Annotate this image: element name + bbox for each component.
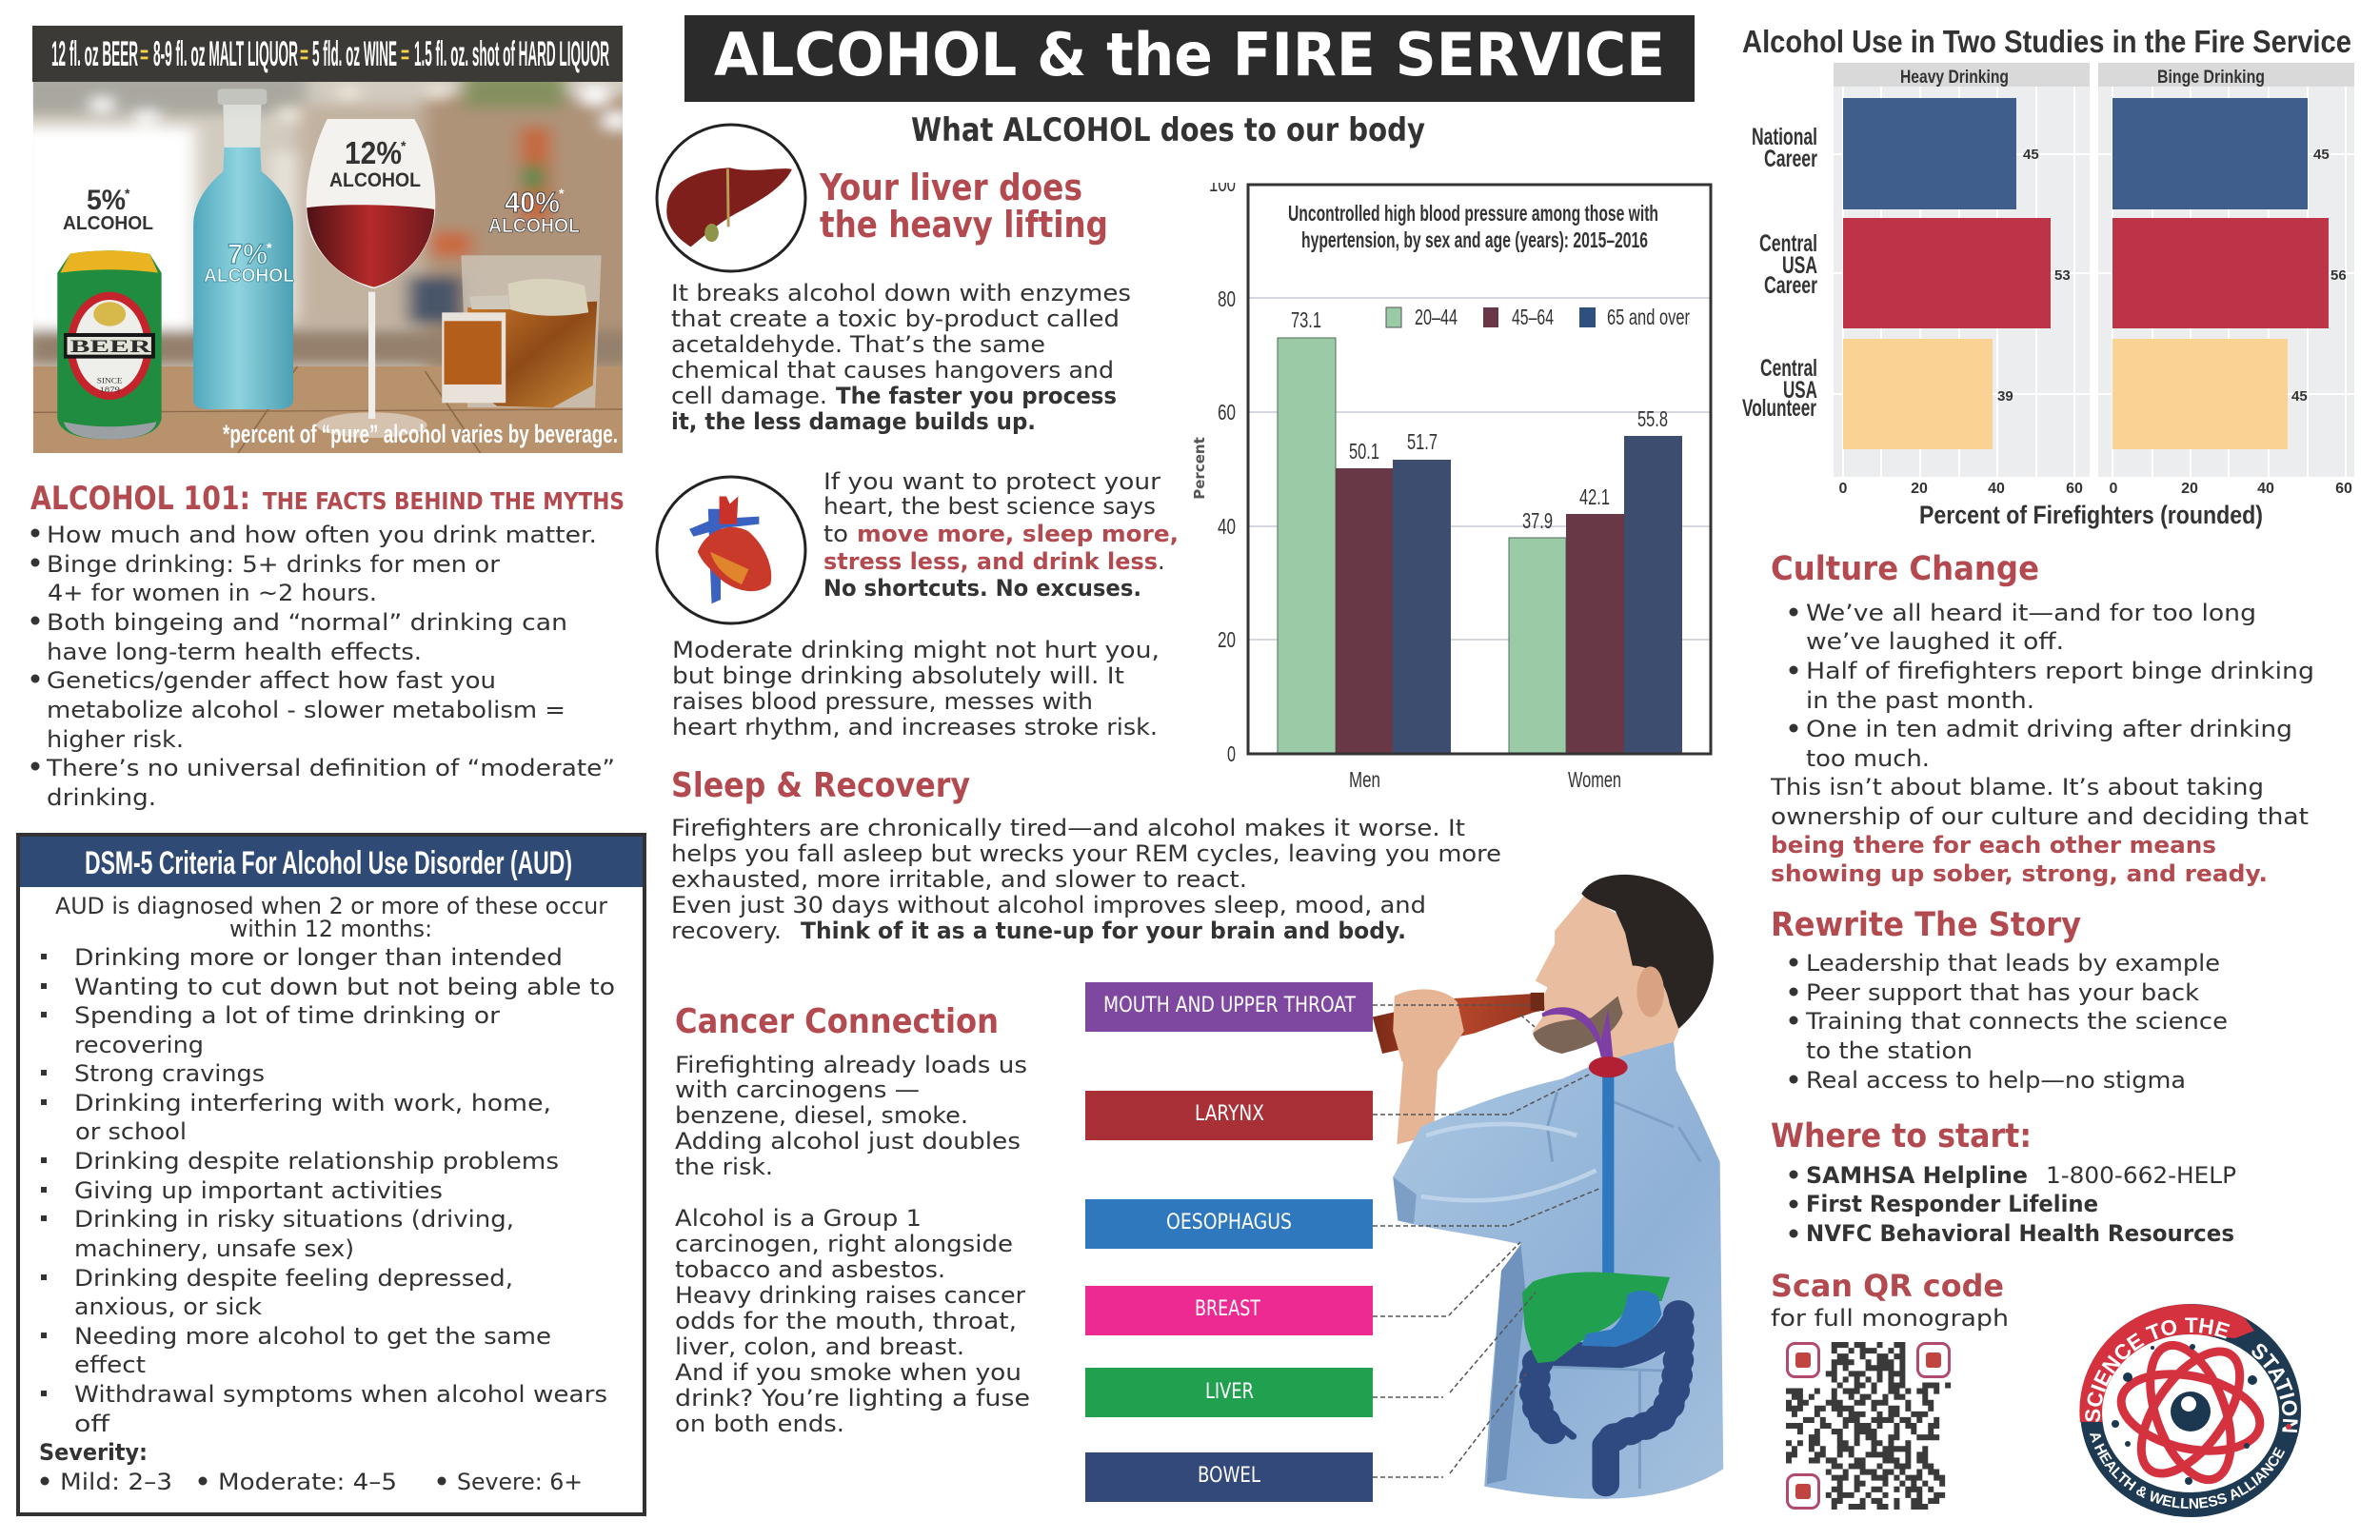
panel: liver [657,125,1131,435]
text: moderate drinking: raises blood pressure, messes with [672,688,1093,715]
text: cancer: Firefighting already loads us [675,1052,1027,1078]
heading: cancer: Cancer Connection [675,1002,999,1041]
alcohol percentage labels: *percent of “pure” alcohol varies by beverage. [223,420,618,448]
facet: binge drinking: 56 [2330,267,2347,284]
facet: heavy drinking: 53 [2054,267,2071,284]
alcohol percentage labels: * [125,186,130,201]
icon: liver [657,125,805,271]
label: mouth and upper throat [1085,982,1535,1032]
text: heart advice: No shortcuts. No excuses. [823,575,1141,602]
heading: liver: the heavy lifting [820,204,1108,246]
label: oesophagus: OESOPHAGUS [1166,1211,1292,1234]
alcohol 101 bullet list: metabolize alcohol - slower metabolism = [47,697,565,723]
heading: liver: Your liver does [819,167,1082,208]
DSM-5 criteria list: machinery, unsafe sex) [74,1235,354,1262]
alcohol 101 bullet list [30,522,615,811]
alcohol 101 bullet list: higher risk. [47,726,184,753]
DSM-5 criteria list: effect [74,1352,146,1378]
y axis: 40 [1218,514,1236,539]
label: breast [1085,1242,1520,1335]
rewrite bullets: Real access to help—no stigma [1806,1067,2186,1094]
category labels: USA [1782,252,1817,279]
label: bowel [1085,1373,1526,1502]
alcohol percentage labels: * [401,138,407,153]
category labels: USA [1783,377,1817,404]
text: cancer: with carcinogens — [675,1076,920,1103]
facet: heavy drinking: 45 [2023,147,2039,163]
chart title [1288,201,1658,252]
text: liver: The faster you process [836,383,1117,409]
text: liver: cell damage. [671,383,827,409]
text: 1.5 fl. oz. shot of HARD LIQUOR [414,34,609,73]
text: cancer: on both ends. [675,1411,844,1437]
alcohol 101 bullet list: There’s no universal definition of “moderate” [46,755,615,781]
resources list: SAMHSA Helpline [1806,1162,2028,1189]
facet: heavy drinking: 39 [1997,388,2013,405]
text: liver: chemical that causes hangovers and [671,357,1114,384]
subtitle: What ALCOHOL does to our body [911,111,1425,149]
DSM-5 criteria list: off [74,1411,110,1437]
heading: sleep: Sleep & Recovery [671,766,970,805]
culture change statement: showing up sober, strong, and ready. [1771,860,2268,887]
drink equivalents bar: = [140,40,149,69]
x axis: 40 [2257,481,2274,497]
DSM-5 header: DSM-5 Criteria For Alcohol Use Disorder (AUD) [85,845,572,881]
facet: binge drinking: Binge Drinking [2157,68,2265,88]
drinks photo [17,73,638,453]
rewrite bullets: Peer support that has your back [1806,979,2199,1006]
panel: rewrite the story [1771,906,2228,1094]
bar chart: uncontrolled high blood pressure [1191,162,1711,792]
text: cancer: tobacco and asbestos. [675,1256,945,1283]
heading: rewrite the story: Rewrite The Story [1771,906,2081,944]
bars: women [1509,406,1682,792]
bars: men: Men [1349,767,1380,792]
beer can: BEER [70,336,152,356]
beer can: 1879 [99,385,120,394]
alcohol percentage labels: 40% [505,186,560,219]
bar chart: alcohol use in two studies [1742,24,2354,529]
alcohol 101 bullet list: How much and how often you drink matter. [47,522,597,548]
x axis: 60 [2066,481,2083,497]
y axis: 0 [1227,741,1236,766]
text: heart advice: stress less, and drink less [823,548,1158,575]
chart title: hypertension, by sex and age (years): 2015–2016 [1301,227,1648,252]
y axis: Percent [1191,437,1208,500]
drink equivalents bar: 5 fld. oz WINE [312,34,397,73]
x axis: 60 [2335,481,2352,497]
label: oesophagus [1085,1188,1601,1249]
severity scale: Severe: 6+ [457,1469,583,1495]
culture change bullets: in the past month. [1806,687,2034,714]
chart legend: 65 and over [1607,305,1690,329]
text: heart advice [823,468,1179,602]
DSM-5 criteria list: Drinking more or longer than intended [74,944,563,971]
organ: bowel [1535,1314,1678,1484]
x axis: 40 [1988,481,2005,497]
alcohol 101 bullet list: drinking. [47,784,156,811]
logo ring text: SCIENCE TO THE [2085,1317,2230,1422]
alcohol percentage labels: 12% [345,135,402,170]
label: larynx: LARYNX [1195,1102,1264,1126]
culture change bullets: One in ten admit driving after drinking [1806,716,2292,742]
drink equivalents bar [32,26,623,82]
alcohol percentage labels: ALCOHOL [63,213,153,234]
alcohol percentage labels [63,135,618,448]
DSM-5 header [20,837,643,887]
text: heart advice: If you want to protect your [823,468,1160,495]
DSM-5 criteria list: Drinking interfering with work, home, [74,1090,551,1116]
logo ring text: STATION [2251,1344,2298,1432]
text: cancer: benzene, diesel, smoke. [675,1102,968,1129]
heading: where to start: Where to start: [1771,1117,2032,1155]
text: cancer: And if you smoke when you [675,1359,1021,1386]
organ: larynx [1589,1056,1628,1077]
heading: alcohol 101: THE FACTS BEHIND THE MYTHS [263,487,625,515]
text: liver: that create a toxic by-product called [671,306,1120,332]
DSM-5 intro [55,893,607,942]
culture change statement: being there for each other means [1771,832,2216,859]
organ: oesophagus [1608,1070,1628,1308]
label: mouth and upper throat: MOUTH AND UPPER THROAT [1103,994,1356,1017]
alcohol percentage labels: * [559,186,565,201]
label: bowel: BOWEL [1198,1464,1261,1488]
category labels: Volunteer [1742,395,1816,422]
facet: heavy drinking [1834,63,2090,477]
drink equivalents bar: 12 fl. oz BEER [51,34,138,73]
head and hair [1533,875,1714,1061]
culture change bullets [1790,600,2314,772]
heading: alcohol 101: ALCOHOL 101: [30,480,250,518]
DSM-5 criteria list: Withdrawal symptoms when alcohol wears [74,1381,607,1408]
bars: women: 42.1 [1579,484,1610,509]
severity scale: Severity: [39,1439,148,1466]
resources list: First Responder Lifeline [1806,1191,2098,1217]
whisky tumbler and shot [442,255,602,407]
DSM-5 intro: AUD is diagnosed when 2 or more of these occur [55,893,607,919]
chart legend [1386,305,1690,329]
DSM-5 criteria list [41,944,615,1437]
text: heart advice: to [823,521,848,547]
text: cancer: the risk. [675,1154,773,1180]
text: heart advice: move more, sleep more, [857,521,1179,547]
DSM-5 criteria list: anxious, or sick [74,1293,262,1320]
text: cancer: liver, colon, and breast. [675,1333,964,1360]
DSM-5 intro: within 12 months: [229,916,432,942]
label: larynx [1085,1074,1591,1140]
rewrite bullets: to the station [1806,1037,1973,1064]
facet: binge drinking: 45 [2291,388,2308,405]
panel: DSM-5 criteria [18,835,645,1514]
panel: cancer connection [675,1002,1030,1437]
icon: QR code [1786,1344,1951,1508]
beer can [57,250,162,440]
alcohol percentage labels: 7% [228,239,268,270]
x axis: Percent of Firefighters (rounded) [1919,501,2263,529]
text: sleep: Firefighters are chronically tired—and alcohol makes it worse. It [671,815,1465,841]
text: moderate drinking: Moderate drinking might not hurt you, [672,637,1160,663]
panel: QR code [1771,1268,2009,1508]
text: sleep: recovery. [671,918,782,944]
resources list: NVFC Behavioral Health Resources [1806,1220,2234,1247]
drink equivalents bar: = [401,40,409,69]
severity scale [39,1439,583,1495]
heading: scan QR: Scan QR code [1771,1268,2004,1304]
DSM-5 criteria list: Drinking despite relationship problems [74,1148,559,1175]
panel: culture change [1770,550,2314,887]
culture change bullets: Half of firefighters report binge drinking [1806,658,2314,684]
DSM-5 criteria list: recovering [74,1032,204,1058]
wine glass [307,119,435,438]
rewrite bullets: Leadership that leads by example [1806,950,2220,977]
title: ALCOHOL & the FIRE SERVICE [714,20,1665,89]
culture change statement [1770,774,2309,887]
text: cancer [675,1052,1030,1437]
text: cancer: drink? You’re lighting a fuse [675,1385,1030,1412]
alcohol percentage labels: ALCOHOL [488,215,580,237]
drink equivalents bar: 8-9 fl. oz MALT LIQUOR [153,34,298,73]
text: cancer: Adding alcohol just doubles [675,1128,1021,1155]
text: heart advice: heart, the best science says [823,493,1156,520]
text: cancer: Alcohol is a Group 1 [675,1205,922,1232]
logo ring text: A HEALTH & WELLNESS ALLIANCE [2090,1433,2285,1510]
icon: heart [657,477,805,623]
x axis: 20 [2181,481,2198,497]
resources list: 1-800-662-HELP [2046,1162,2236,1189]
chart title: Uncontrolled high blood pressure among those with [1288,201,1658,226]
text: sleep: helps you fall asleep but wrecks your REM cycles, leaving you more [671,840,1501,867]
heading: alcohol 101 [30,480,625,518]
DSM-5 criteria list: Strong cravings [74,1060,265,1087]
alcohol 101 bullet list: Genetics/gender affect how fast you [47,667,496,694]
heading: culture change: Culture Change [1771,550,2039,588]
text: sleep: exhausted, more irritable, and slower to react. [671,866,1247,893]
organ: mouth and throat [1541,1007,1613,1057]
DSM-5 criteria list: Needing more alcohol to get the same [74,1323,551,1350]
x axis: 0 [1839,481,1848,497]
label: liver [1085,1293,1536,1417]
alcohol 101 bullet list: 4+ for women in ~2 hours. [48,580,377,606]
text: cancer: odds for the mouth, throat, [675,1308,1017,1334]
organ: stomach [1581,1291,1661,1347]
beer can: SINCE [97,377,123,385]
text: moderate drinking [672,637,1160,740]
logo ring text [2085,1317,2298,1510]
bars: women: 37.9 [1522,508,1553,533]
alcohol 101 bullet list: Binge drinking: 5+ drinks for men or [47,551,500,578]
category labels: Central [1759,230,1817,257]
bars: women: 55.8 [1637,406,1668,431]
culture change bullets: We’ve all heard it—and for too long [1806,600,2256,626]
bars: men: 73.1 [1291,307,1321,332]
alcohol 101 bullet list: have long-term health effects. [47,639,422,665]
label: liver: LIVER [1205,1380,1254,1404]
man's arm and shirt [1393,1042,1723,1499]
bars: men [1278,307,1451,792]
illustration: man drinking with organs [1373,875,1723,1499]
anatomy labels [1085,982,1601,1502]
text: liver: it, the less damage builds up. [671,408,1036,435]
DSM-5 criteria list: Wanting to cut down but not being able to [74,974,615,1000]
alcohol 101 bullet list: Both bingeing and “normal” drinking can [47,609,567,636]
heading: scan QR: for full monograph [1771,1305,2009,1332]
alcohol percentage labels: * [267,240,272,255]
facet: binge drinking [2098,63,2354,477]
bars: women: Women [1568,767,1621,792]
drink equivalents bar: = [300,40,308,69]
category labels [1742,124,1817,422]
x axis [1839,481,2352,529]
logo: science to the station [2079,1304,2301,1517]
x axis: 20 [1911,481,1928,497]
rewrite bullets: Training that connects the science [1805,1008,2228,1035]
bars: men: 51.7 [1407,429,1438,454]
text: moderate drinking: but binge drinking absolutely will. It [672,662,1124,689]
culture change bullets: too much. [1806,745,1930,772]
resources list [1790,1162,2236,1247]
organ: liver [1522,1272,1670,1363]
culture change bullets: we’ve laughed it off. [1806,628,2064,655]
panel: alcohol 101 [30,480,625,811]
y axis: 20 [1218,627,1236,652]
category labels: National [1752,124,1817,150]
text: liver: acetaldehyde. That’s the same [671,331,1045,358]
DSM-5 criteria list: Drinking despite feeling depressed, [74,1265,513,1292]
text: sleep: Even just 30 days without alcohol improves sleep, mood, and [671,892,1426,918]
heading: liver [819,167,1108,246]
bars: men: 50.1 [1349,439,1379,464]
text: cancer: carcinogen, right alongside [675,1231,1013,1257]
heading: scan QR [1771,1268,2009,1332]
text: sleep: Think of it as a tune-up for your brain and body. [801,918,1406,944]
y axis: 80 [1218,286,1236,311]
culture change statement: ownership of our culture and deciding that [1771,803,2309,830]
y axis: 60 [1218,400,1236,424]
facet: heavy drinking: Heavy Drinking [1900,68,2009,88]
logo atom [2112,1334,2291,1491]
text: cancer: Heavy drinking raises cancer [675,1282,1025,1309]
text: sleep [671,815,1501,944]
beer bottle and hand [1373,989,1544,1070]
alcohol percentage labels: ALCOHOL [329,169,421,191]
rewrite bullets [1790,950,2228,1094]
text: liver: It breaks alcohol down with enzymes [671,280,1131,306]
alcohol percentage labels: ALCOHOL [204,266,294,286]
blue bottle [193,89,293,409]
category labels: Career [1764,272,1817,299]
text: liver [671,280,1131,435]
panel: where to start [1771,1117,2236,1247]
panel: drink equivalents photo [17,26,638,453]
category labels: Career [1764,146,1817,172]
text: moderate drinking: heart rhythm, and increases stroke risk. [672,714,1158,740]
y axis [1191,162,1239,766]
DSM-5 criteria list: Spending a lot of time drinking or [74,1002,500,1029]
panel: heart [657,468,1179,740]
alcohol percentage labels: 5% [87,185,126,216]
DSM-5 criteria list: or school [75,1118,187,1145]
category labels: Central [1760,355,1817,382]
DSM-5 criteria list: Drinking in risky situations (driving, [74,1206,514,1233]
chart legend: 20–44 [1415,305,1458,329]
severity scale: Mild: 2–3 [60,1469,172,1495]
panel: sleep and recovery [671,766,1501,944]
label: breast: BREAST [1195,1297,1260,1321]
severity scale: Moderate: 4–5 [218,1469,397,1495]
facet: binge drinking: 45 [2313,147,2330,163]
DSM-5 criteria list: Giving up important activities [74,1177,443,1204]
x axis: 0 [2110,481,2118,497]
culture change statement: This isn’t about blame. It’s about taking [1770,774,2264,800]
chart legend: 45–64 [1512,305,1554,329]
y axis: 100 [1209,171,1236,196]
text: heart advice: . [1158,548,1165,575]
